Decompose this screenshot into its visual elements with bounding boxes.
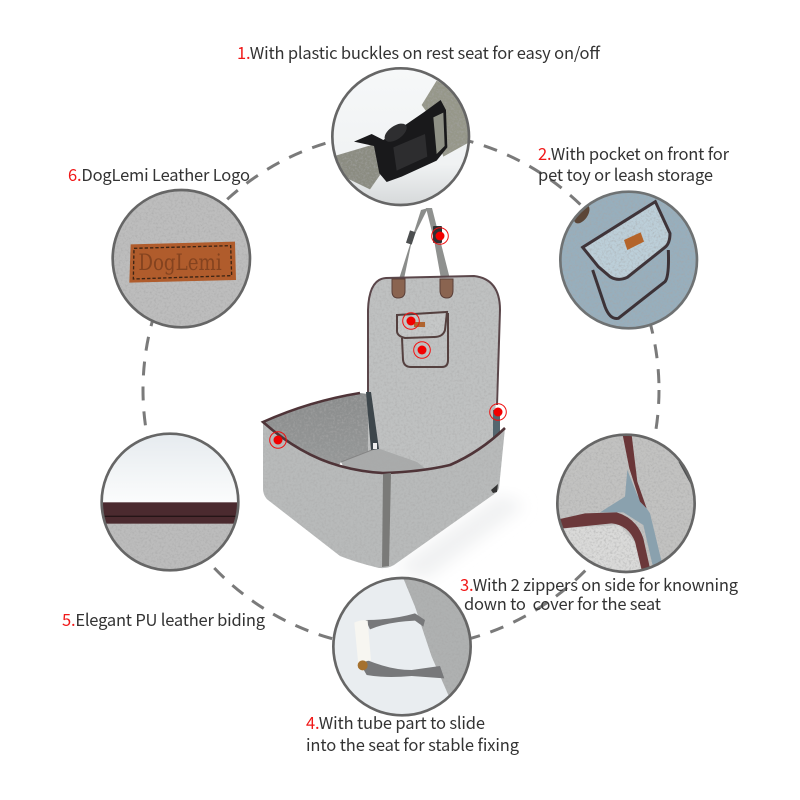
pocket flap bbox=[397, 312, 447, 338]
leather rim bbox=[263, 393, 505, 473]
floor crease bbox=[341, 448, 377, 462]
detail circle 2: pocket bbox=[560, 192, 697, 328]
pocket flap bbox=[583, 202, 670, 279]
small foot bbox=[491, 484, 498, 493]
label 3: down to cover for the seat bbox=[464, 591, 661, 615]
label 2 bbox=[538, 141, 730, 186]
ground shadow bbox=[395, 495, 525, 580]
label 6: 6.DogLemi Leather Logo bbox=[68, 162, 250, 186]
front pocket bbox=[402, 313, 448, 367]
right side zipper bbox=[493, 410, 500, 438]
strap through frame bbox=[433, 113, 445, 154]
pocket flap binding bbox=[397, 312, 447, 338]
label 4: into the seat for stable fixing bbox=[306, 732, 520, 756]
tube opening bbox=[358, 660, 368, 670]
detail circle 6: leather logo bbox=[113, 190, 250, 327]
label 4: 4.With tube part to slide bbox=[306, 710, 485, 734]
marker 2: pocket flap bbox=[403, 313, 419, 329]
lower felt bbox=[564, 525, 642, 570]
upper strap bbox=[366, 613, 425, 629]
dark corner bbox=[678, 462, 690, 484]
logo tag bbox=[624, 232, 644, 250]
leather band bbox=[95, 502, 245, 524]
zipper gap bbox=[366, 392, 379, 450]
hanging strap with buckle bbox=[399, 208, 450, 279]
central product: car seat bbox=[263, 208, 525, 580]
pocket flap binding bbox=[583, 202, 670, 279]
pocket logo tag bbox=[414, 322, 425, 327]
buckle center plate bbox=[393, 134, 427, 171]
buckle latch bbox=[384, 124, 406, 142]
felt bbox=[106, 524, 234, 569]
detail circle 3: zippers bbox=[557, 435, 697, 575]
buckle body bbox=[354, 100, 447, 182]
marker 5: leather binding bbox=[270, 432, 286, 448]
leather tag bbox=[129, 242, 236, 283]
label 3: 3.With 2 zippers on side for knowning bbox=[460, 572, 739, 596]
zipper pull bbox=[373, 443, 377, 449]
horizontal leather binding bbox=[560, 512, 650, 570]
marker 1: buckle bbox=[432, 228, 448, 244]
back panel leather binding bbox=[368, 276, 500, 405]
tag stitching bbox=[133, 246, 232, 279]
dashed ring connecting the detail circles bbox=[143, 132, 659, 648]
lower strap bbox=[360, 661, 444, 678]
label 3 bbox=[460, 572, 739, 615]
label 2: 2.With pocket on front for bbox=[538, 141, 730, 165]
pocket body bbox=[593, 250, 669, 319]
seat inner side wall bbox=[263, 393, 372, 480]
label 1: 1.With plastic buckles on rest seat for easy on/off bbox=[237, 40, 601, 64]
stitch line bbox=[95, 516, 245, 517]
right strap bbox=[422, 81, 473, 157]
label 2: pet toy or leash storage bbox=[538, 162, 713, 186]
leather corner bbox=[574, 206, 590, 224]
label 5: 5.Elegant PU leather biding bbox=[62, 607, 266, 631]
zipper tape bbox=[600, 470, 662, 568]
corner seam strip bbox=[382, 473, 391, 567]
left strap bbox=[336, 145, 380, 190]
detail circle 1: plastic buckle bbox=[330, 68, 473, 205]
tag logo text: DogLemi bbox=[138, 251, 222, 276]
felt edge bbox=[404, 580, 470, 695]
detail circle 4: tube bbox=[333, 578, 473, 715]
front pocket binding bbox=[402, 313, 448, 367]
marker 4: zipper bbox=[490, 404, 506, 420]
back panel bbox=[368, 276, 500, 480]
leather strap tabs bbox=[392, 279, 453, 298]
seat floor bbox=[341, 448, 440, 480]
detail circle 5: PU leather binding bbox=[95, 434, 245, 573]
front and side body bbox=[263, 423, 505, 568]
vertical leather binding bbox=[623, 435, 647, 508]
white tube bbox=[354, 620, 371, 665]
marker 3: pocket bbox=[414, 342, 430, 358]
label 4 bbox=[306, 710, 520, 756]
